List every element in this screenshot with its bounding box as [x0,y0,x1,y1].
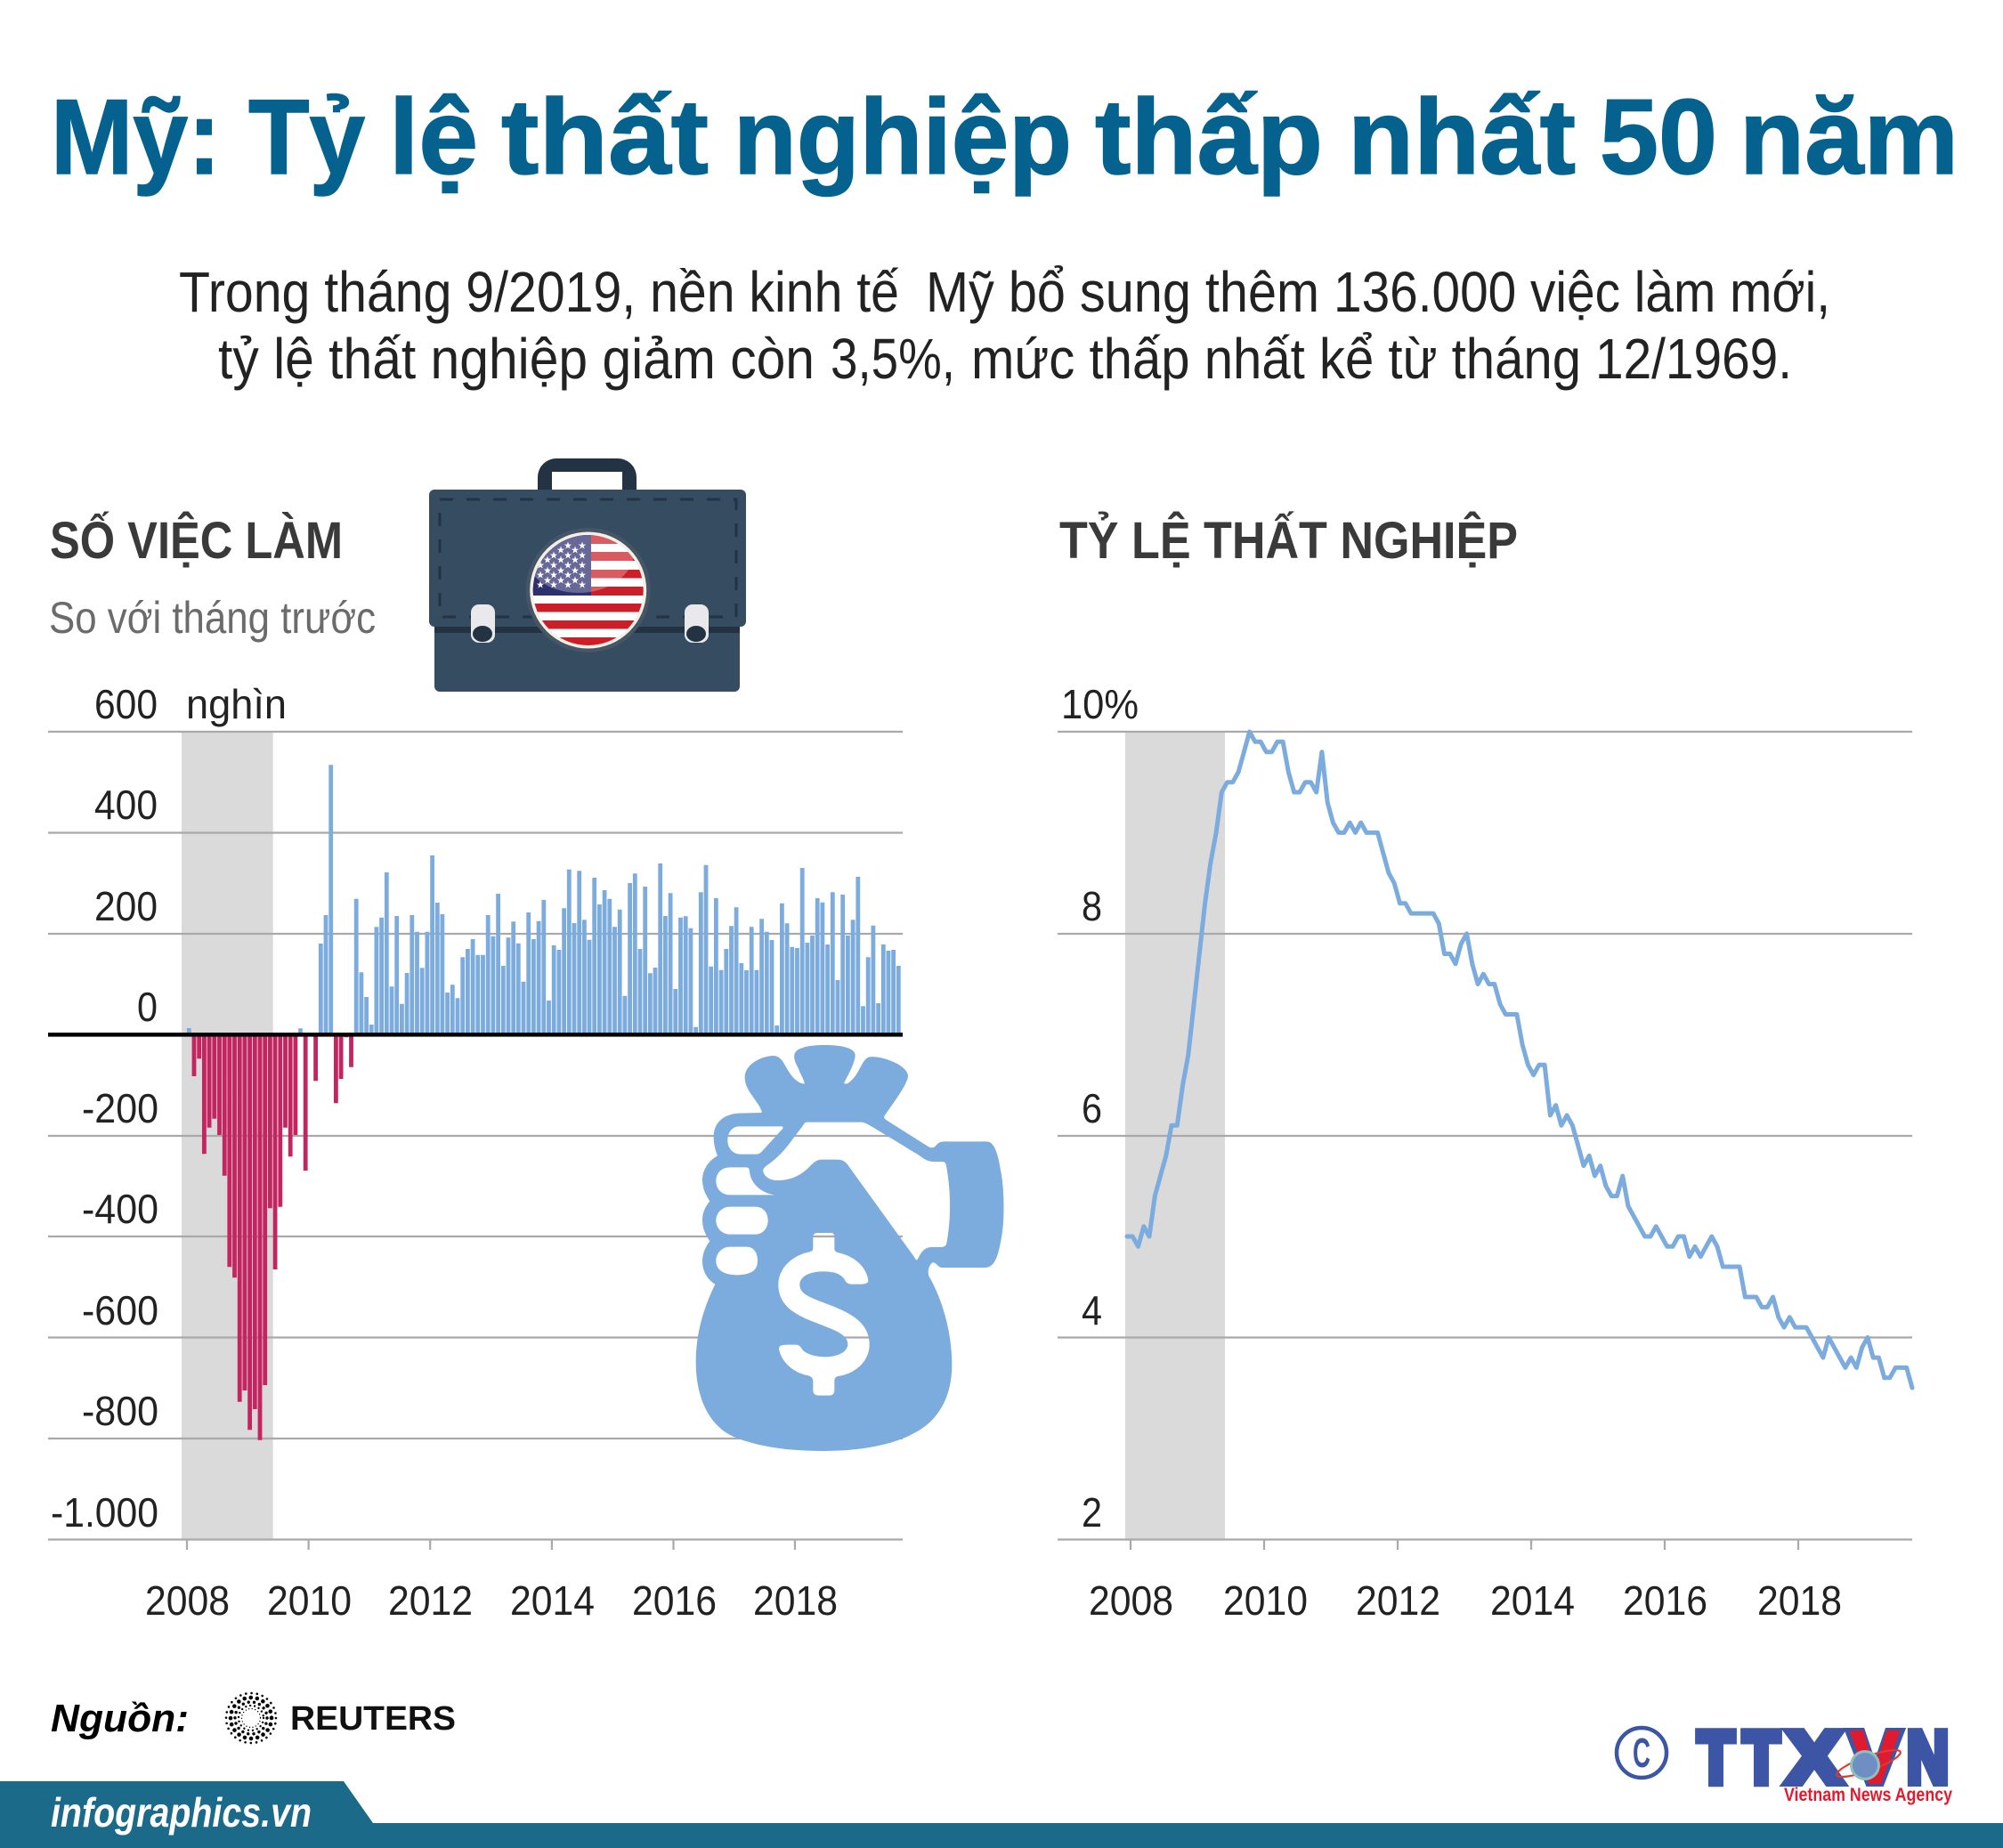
x axis labels: 2010 [267,1577,352,1624]
icon: briefcase with US flag: ★ [549,551,558,560]
y axis labels [51,681,287,1536]
TTXVN logo: T [1698,1716,1734,1798]
red bars: jobs lost [194,1036,351,1440]
TTXVN logo: N [1907,1716,1949,1798]
TTXVN logo: V [1851,1716,1899,1798]
subtitle text block: tỷ lệ thất nghiệp giảm còn [218,327,815,391]
x axis labels: 2014 [510,1577,595,1624]
title: thấp [1095,77,1323,197]
x axis labels: 2014 [1490,1577,1575,1624]
TTXVN logo: Vietnam News Agency [1784,1785,1952,1805]
icon: briefcase with US flag: ★ [564,580,572,589]
title: Tỷ [248,77,365,197]
copyright symbol [1617,1728,1666,1778]
heading: jobs: SỐ VIỆC LÀM [50,512,343,570]
x axis labels: 2016 [1623,1577,1707,1624]
icon: briefcase with US flag: ★ [543,576,552,585]
copyright symbol: C [1633,1730,1650,1776]
title: năm [1739,77,1958,197]
icon: briefcase with US flag: ★ [564,571,572,580]
title [51,77,1958,197]
x axis labels: 2012 [1356,1577,1440,1624]
icon: briefcase with US flag: ★ [543,566,552,575]
icon: briefcase with US flag: ★ [578,551,587,560]
icon: briefcase with US flag: ★ [571,576,580,585]
icon: briefcase with US flag: ★ [564,541,572,550]
icon: briefcase with US flag: ★ [578,561,587,570]
icon: briefcase with US flag: ★ [564,561,572,570]
panel: jobs bar chart [48,681,903,1624]
title: nghiệp [734,77,1072,197]
recession shading [1125,732,1225,1540]
title: thất [501,77,709,197]
y axis labels: 10% [1061,681,1139,727]
subtitle text block: 3,5%, [831,327,955,391]
footer banner [0,1781,2003,1848]
TTXVN logo: X [1787,1716,1842,1798]
footer banner: infographics.vn [51,1789,312,1836]
subtitle text block: 136.000 việc làm mới, [1334,260,1830,324]
y axis labels: nghìn [186,681,287,727]
TTXVN logo: T [1743,1716,1780,1798]
icon: briefcase with US flag: ★ [549,571,558,580]
icon: briefcase with US flag: ★ [556,555,565,564]
x axis labels [145,1577,838,1624]
Reuters logo: REUTERS [290,1700,456,1738]
recession shading [182,732,273,1540]
icon: briefcase with US flag: ★ [571,566,580,575]
x axis labels: 2012 [388,1577,473,1624]
x axis labels: 2016 [632,1577,717,1624]
y axis labels: 200 [94,883,158,929]
icon: hand holding money bag [696,1045,1003,1451]
x axis labels: 2018 [753,1577,838,1624]
icon: briefcase with US flag: ★ [571,555,580,564]
subheading: compared to previous month: So với tháng trước [49,593,376,643]
icon: briefcase with US flag: ★ [578,541,587,550]
source label: Nguồn: [51,1697,189,1740]
icon: briefcase with US flag: ★ [549,580,558,589]
title: lệ [389,77,478,197]
icon: briefcase with US flag: ★ [556,546,565,555]
icon: briefcase with US flag: ★ [543,555,552,564]
y axis labels: -600 [82,1287,158,1333]
icon: briefcase with US flag: ★ [549,561,558,570]
x axis labels: 2008 [1089,1577,1173,1624]
y axis labels: 8 [1082,883,1102,929]
x axis labels: 2010 [1223,1577,1308,1624]
TTXVN logo: V [1849,1716,1901,1798]
icon: briefcase with US flag: ★ [571,546,580,555]
y axis labels: 6 [1082,1085,1102,1131]
icon: briefcase with US flag: ★ [536,561,545,570]
y axis labels: -1.000 [51,1489,158,1536]
subtitle text block [179,260,1830,391]
Reuters logo [226,1693,456,1743]
x axis labels [1089,1577,1842,1624]
subtitle text block: mức thấp nhất kể từ tháng [971,327,1581,391]
title: Mỹ: [51,77,221,197]
subtitle text block: 12/1969. [1595,327,1792,391]
y axis labels: 400 [94,782,158,828]
icon: briefcase with US flag: ★ [578,571,587,580]
icon: briefcase with US flag [429,458,746,692]
icon: briefcase with US flag: ★ [536,580,545,589]
subtitle text block: Trong tháng 9/2019, nền kinh tế [179,260,899,324]
y axis labels: -800 [82,1388,158,1434]
blue bars: jobs added [189,765,898,1033]
icon: briefcase with US flag: ★ [578,580,587,589]
x axis labels: 2018 [1757,1577,1842,1624]
subtitle text block: Mỹ bổ sung thêm [926,260,1319,324]
zero baseline [48,1033,903,1037]
TTXVN logo [1698,1716,1952,1805]
x axis labels: 2008 [145,1577,230,1624]
icon: briefcase with US flag: ★ [536,571,545,580]
y axis labels: -400 [82,1186,158,1232]
y axis labels [1061,681,1139,1536]
heading: unemployment rate: TỶ LỆ THẤT NGHIỆP [1059,512,1518,570]
icon: briefcase with US flag: ★ [556,576,565,585]
y axis labels: 2 [1082,1489,1102,1536]
unemployment rate line [1127,732,1912,1388]
y axis labels: 600 [94,681,158,727]
title: nhất [1348,77,1576,197]
y axis labels: 4 [1082,1287,1102,1333]
title: 50 [1600,77,1717,197]
y axis labels: 0 [137,984,158,1030]
icon: briefcase with US flag: ★ [564,551,572,560]
icon: briefcase with US flag: ★ [556,566,565,575]
y axis labels: -200 [82,1085,158,1131]
panel: unemployment line chart [1058,681,1912,1624]
